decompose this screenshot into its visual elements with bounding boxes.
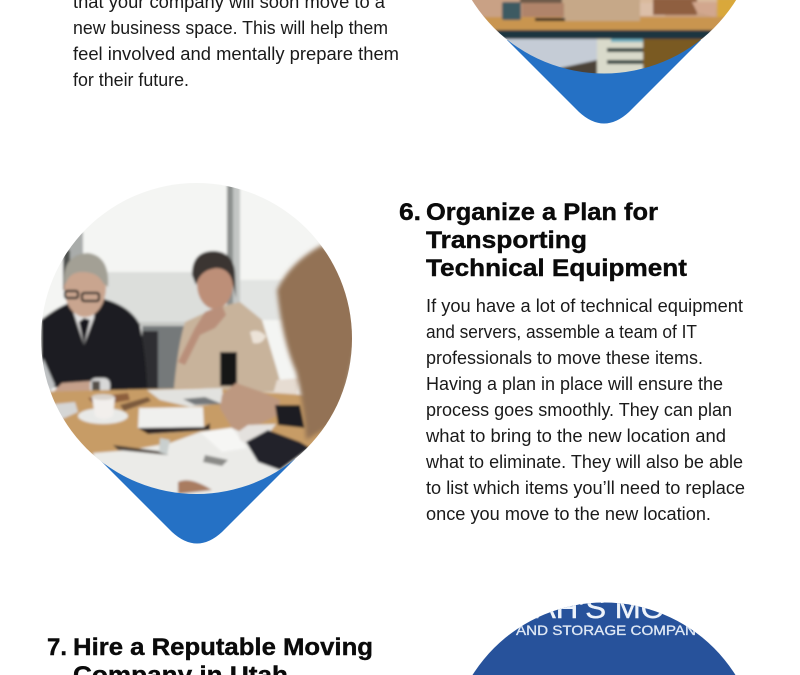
photo: team at table: [472, 0, 736, 74]
step 6 heading: Organize a Plan for: [426, 199, 658, 226]
step 6 heading: Transporting: [426, 227, 587, 254]
step 6 body copy: professionals to move these items.: [426, 348, 703, 368]
papers: [93, 425, 310, 500]
step 7 heading: 7.: [47, 634, 67, 661]
step 5 pin image: [472, 0, 736, 124]
step 6 body copy: and servers, assemble a team of IT: [426, 322, 697, 342]
step 5 text block: [73, 0, 399, 90]
step 6 heading: Technical Equipment: [426, 255, 687, 282]
step 6 body copy: If you have a lot of technical equipment: [426, 296, 743, 316]
step 5 text block: new business space. This will help them: [73, 18, 388, 38]
step 6 heading: [426, 199, 687, 282]
step 6 body copy: to list which items you’ll need to replace: [426, 478, 745, 498]
hands and sleeve: [220, 383, 280, 435]
notebook: [138, 407, 210, 434]
man in dark suit: [41, 298, 147, 398]
step 5 text block: for their future.: [73, 70, 189, 90]
step 7 heading: [47, 634, 373, 675]
woman in beige blazer: [174, 302, 283, 392]
step 6 body copy: [425, 296, 745, 524]
step 6 text block: [399, 199, 745, 524]
step 7 pin image: moving company sign: AH’S MO: [535, 593, 665, 625]
step 6 pin image: [30, 180, 360, 544]
foreground blurred hair: [277, 245, 360, 440]
coffee cup: [78, 408, 128, 424]
table: [50, 386, 340, 456]
step 7 pin image: moving company sign: AND STORAGE COMPAN: [516, 622, 696, 638]
step 6 body copy: what to eliminate. They will also be able: [425, 452, 743, 472]
pin tip: step 6: [99, 459, 295, 544]
photo: business meeting: [30, 180, 360, 500]
step 5 text block: feel involved and mentally prepare them: [73, 44, 399, 64]
step number 6: 6.: [399, 199, 421, 226]
step 6 body copy: what to bring to the new location and: [425, 426, 726, 446]
step 7 heading: Hire a Reputable Moving: [73, 634, 373, 661]
step 7 pin image: moving company sign: [472, 602, 736, 675]
step 6 body copy: Having a plan in place will ensure the: [426, 374, 723, 394]
step 6 body copy: once you move to the new location.: [426, 504, 711, 524]
pin tip: step 5: [507, 40, 701, 124]
step 6 body copy: process goes smoothly. They can plan: [426, 400, 732, 420]
